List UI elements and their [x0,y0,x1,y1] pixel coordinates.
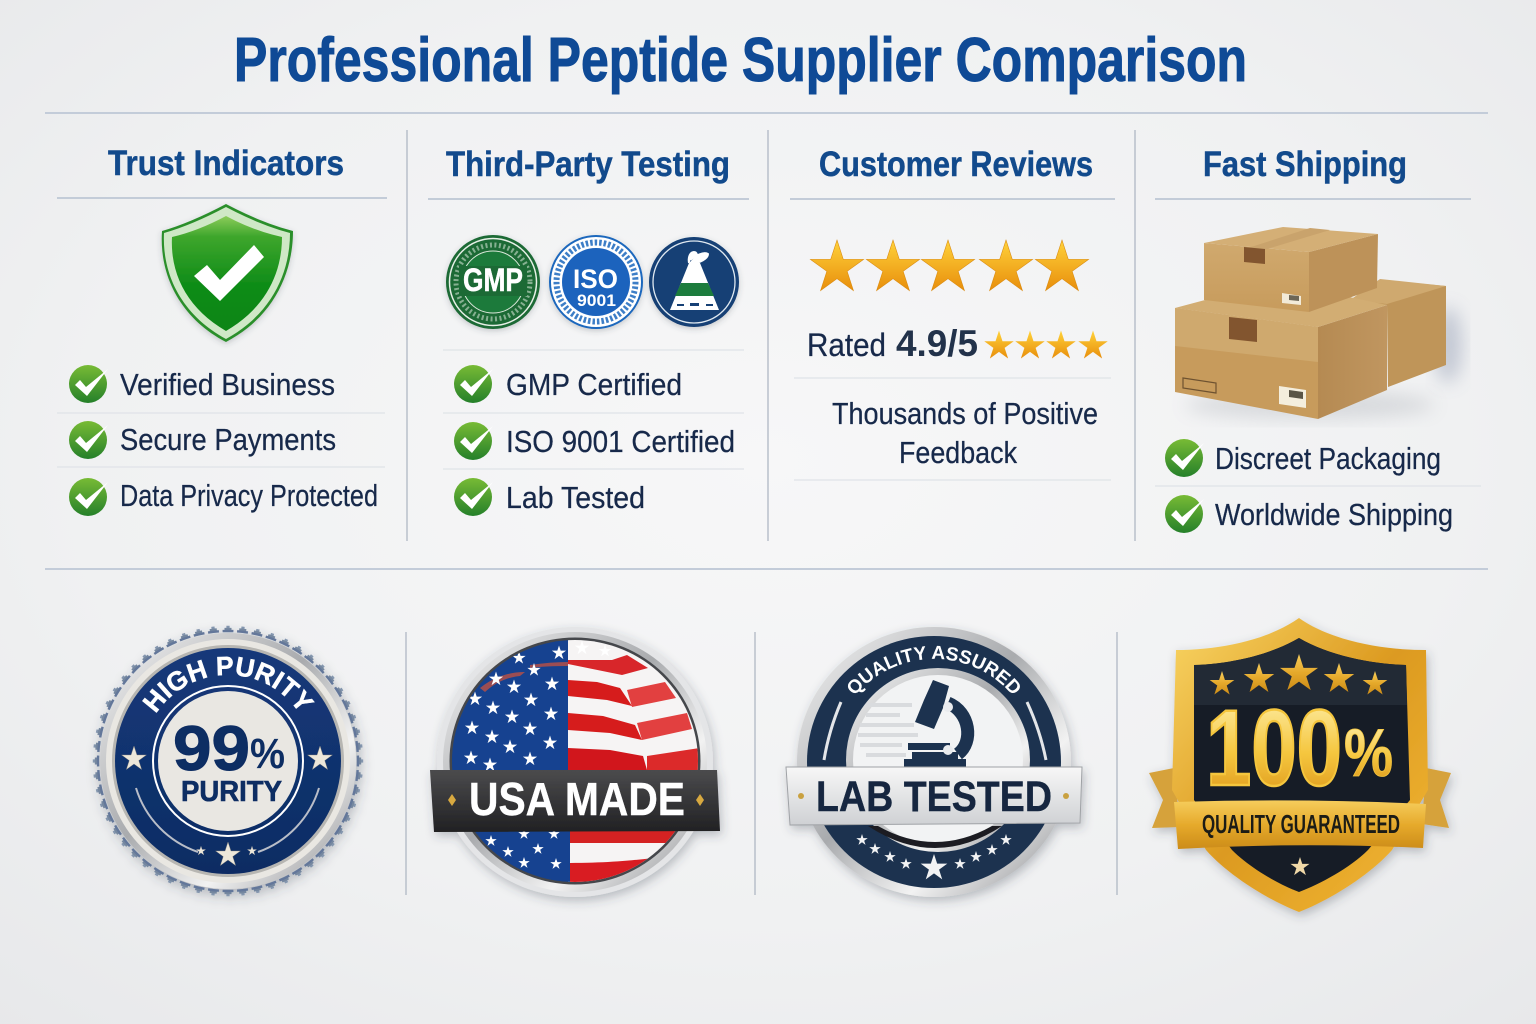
heading: trust indicators: Trust Indicators [108,144,344,183]
text: GMP certified: GMP Certified [506,367,682,402]
text: ISO 9001 certified: ISO 9001 Certified [506,424,735,459]
text: rated: Rated [807,327,886,363]
icon: check [454,365,493,403]
icon: check [1165,439,1204,477]
badge: lab tested [782,625,1090,907]
badge: 100% quality guaranteed [1149,618,1451,912]
text: worldwide shipping: Worldwide Shipping [1215,497,1453,532]
panel: fast shipping [1155,145,1481,533]
back box [1350,280,1446,387]
icon: lab flask seal [649,237,739,327]
heading: customer reviews: Customer Reviews [819,145,1093,184]
icon: check [69,365,108,403]
icon: check [454,478,493,516]
text: discreet packaging: Discreet Packaging [1215,441,1441,476]
panel: customer reviews [790,145,1115,480]
bottom box [1175,308,1318,419]
icon: GMP seal: GMP [463,262,523,298]
panel: trust indicators [57,144,387,516]
text: verified business: Verified Business [120,367,335,402]
title: Professional Peptide Supplier Comparison [234,26,1247,95]
icon: green shield with check [162,204,293,342]
small rating stars [984,330,1108,359]
heading: fast shipping: Fast Shipping [1203,145,1407,184]
icon: microscope [904,680,968,769]
badge stars [856,834,1012,879]
text: purity: PURITY [181,776,282,808]
banner: quality guaranteed: QUALITY GUARANTEED [1202,809,1400,839]
icon: ISO 9001 seal: 9001 [577,291,616,310]
text: 99%: 99 [173,714,250,784]
five large stars [810,240,1089,291]
icon: ISO 9001 seal: ISO [573,264,618,294]
text: data privacy protected: Data Privacy Protected [120,478,378,513]
heading: third-party testing: Third-Party Testing [446,145,730,184]
text: percent sign: % [250,730,285,778]
text: 100: 100 [1206,687,1342,808]
text: thousands of positive feedback: Thousands of Positive [832,396,1098,431]
badge: USA made [430,627,720,897]
top box [1204,243,1309,312]
text: thousands of positive feedback [832,396,1098,470]
badge: high purity 99% [92,626,368,903]
banner: USA made: USA MADE [469,773,685,825]
icon: cardboard boxes [1175,227,1462,419]
text: 4.9/5 rating: 4.9/5 [896,323,978,364]
text: quality assured: QUALITY ASSURED [848,646,1020,694]
text: percent sign: % [1344,715,1393,791]
icon: check [1165,495,1204,533]
text: secure payments: Secure Payments [120,422,336,457]
badge stars [122,746,332,866]
icon: check [69,421,108,459]
text: high purity: HIGH PURITY [142,656,315,713]
icon: bottom star [1290,857,1310,875]
shield stars [1210,654,1387,695]
icon: check [454,422,493,460]
banner: lab tested: LAB TESTED [816,773,1052,821]
icon: ISO 9001 seal [550,236,642,328]
text: thousands of positive feedback: Feedback [899,435,1017,470]
panel: third-party testing [428,145,749,516]
text: lab tested: Lab Tested [506,480,645,515]
icon: check [69,478,108,516]
icon: GMP seal [446,235,540,329]
flag [450,638,701,890]
banner: quality guaranteed [1174,800,1426,849]
